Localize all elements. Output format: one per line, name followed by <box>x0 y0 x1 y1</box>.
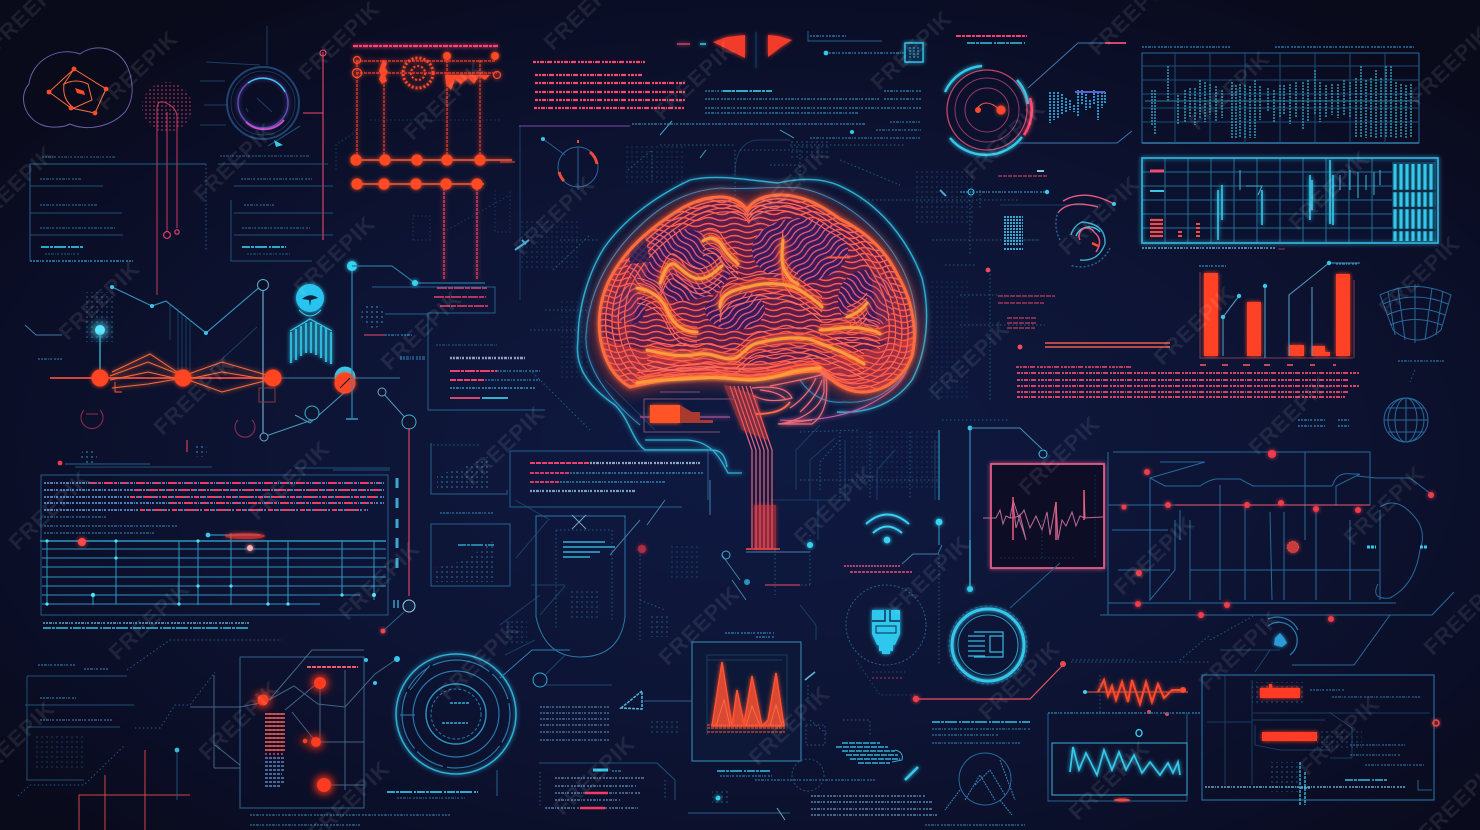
text panel bottom center <box>539 763 790 820</box>
gauge: purple ring <box>42 26 326 240</box>
brain illustration <box>580 180 930 549</box>
dotted globe icon bottom <box>925 753 1025 825</box>
watermarks: FREEPIK <box>376 286 467 375</box>
hot spot <box>827 257 850 258</box>
wifi caption and node <box>844 430 942 665</box>
pipe cluster and small nodes <box>505 480 818 655</box>
watermarks: FREEPIK <box>744 141 835 230</box>
panel: bottom left notes <box>18 640 282 796</box>
panel: blue waveform chart <box>1142 47 1419 143</box>
red frame lines bottom left <box>79 672 215 830</box>
brain body with wavy folds <box>600 196 913 390</box>
brain stem <box>724 385 780 549</box>
cyan text and wing icon bottom <box>717 672 1030 815</box>
watermarks: FREEPIK <box>1064 736 1155 825</box>
dot charts <box>431 443 510 586</box>
right lower notes <box>967 420 1350 592</box>
icon: document ring <box>949 606 1027 684</box>
icon: cyan connector in dotted ring <box>846 585 926 695</box>
red line bars and pink text <box>960 268 1360 400</box>
watermarks: FREEPIK <box>1284 146 1375 235</box>
circular radar bottom <box>387 650 570 798</box>
triangle ruler icon <box>533 655 692 740</box>
pink dotted node with pipes <box>142 82 192 295</box>
orange block under brain <box>644 392 735 432</box>
red bar chart <box>1199 261 1360 365</box>
teal swirl <box>1220 617 1298 672</box>
watermarks: FREEPIK <box>189 118 280 207</box>
watermarks: FREEPIK <box>1294 691 1385 780</box>
cerebellum <box>752 374 827 424</box>
mini waveform <box>1050 90 1105 123</box>
watermarks: FREEPIK <box>1014 411 1105 500</box>
hud dots and concentric dial <box>960 171 1116 267</box>
watermarks: FREEPIK <box>1374 231 1465 320</box>
top center text lines <box>519 31 923 138</box>
watermarks: FREEPIK <box>4 466 95 555</box>
panel: red bars data frame <box>1072 660 1439 805</box>
watermarks: FREEPIK <box>509 171 600 260</box>
icon: wifi <box>866 514 909 542</box>
panel: second text list <box>218 164 333 261</box>
watermarks: FREEPIK <box>744 681 835 770</box>
brain bright outline <box>599 195 914 392</box>
icon: cyan pin with fan <box>290 284 332 364</box>
red circuit diagram <box>350 46 512 280</box>
small gauge with red arcs <box>500 137 598 190</box>
watermarks: FREEPIK <box>974 636 1065 725</box>
glowing sulci <box>637 238 880 383</box>
watermarks: FREEPIK <box>654 581 745 670</box>
panel: pink ECG monitor <box>983 464 1104 608</box>
watermarks: FREEPIK <box>1149 281 1240 370</box>
watermarks: FREEPIK <box>149 351 240 440</box>
shield panel <box>500 500 625 657</box>
watermarks: FREEPIK <box>54 256 145 345</box>
wireframe sphere <box>1384 361 1444 442</box>
panel: circle hud top right <box>945 36 1132 155</box>
bottom wave panel <box>1048 680 1200 802</box>
watermarks: FREEPIK <box>244 436 335 525</box>
watermarks: FREEPIK <box>924 316 1015 405</box>
panel: left text list <box>30 164 206 261</box>
panel: cyan grid chart <box>1142 158 1438 249</box>
watermarks: FREEPIK <box>399 56 490 145</box>
circuit diagram panel right <box>1100 450 1454 665</box>
watermarks: FREEPIK <box>649 36 740 125</box>
circuit traces around the brain <box>515 121 1100 500</box>
panel: cloud network icon <box>23 48 132 128</box>
brain glow <box>599 195 914 392</box>
watermarks: FREEPIK <box>104 576 195 665</box>
panel: report near brain stem <box>510 451 708 507</box>
red peaks chart <box>692 633 801 761</box>
red triangles marker <box>677 32 792 68</box>
watermarks: FREEPIK <box>459 401 550 490</box>
watermarks: FREEPIK <box>1244 371 1335 460</box>
watermarks: FREEPIK <box>92 26 183 115</box>
panel: small report <box>372 125 545 410</box>
panel: data table <box>40 461 388 628</box>
watermarks: FREEPIK <box>884 531 975 620</box>
timeline chart with nodes <box>25 280 400 437</box>
watermarks: FREEPIK <box>1109 511 1200 600</box>
watermarks: FREEPIK <box>1184 46 1275 135</box>
watermarks: FREEPIK <box>1339 461 1430 550</box>
faint dotted schematic <box>336 120 510 240</box>
watermarks: FREEPIK <box>194 676 285 765</box>
connector lines and nodes <box>260 261 485 441</box>
wireframe funnel <box>1380 284 1451 343</box>
watermarks: FREEPIK <box>434 616 525 705</box>
watermarks: FREEPIK <box>789 461 880 550</box>
watermarks: FREEPIK <box>1194 606 1285 695</box>
top pink text block <box>533 62 685 108</box>
table side icons and pink pipe <box>75 428 415 633</box>
red pointer line <box>913 615 1255 702</box>
watermarks: FREEPIK <box>289 211 380 300</box>
watermarks: FREEPIK <box>866 6 957 95</box>
panel: red glow node chart <box>190 650 450 825</box>
brain outline: cyan contours <box>577 177 927 473</box>
watermarks: FREEPIK <box>334 536 425 625</box>
watermarks: FREEPIK <box>549 731 640 820</box>
watermarks: FREEPIK <box>1054 171 1145 260</box>
watermarks: FREEPIK <box>959 96 1050 185</box>
